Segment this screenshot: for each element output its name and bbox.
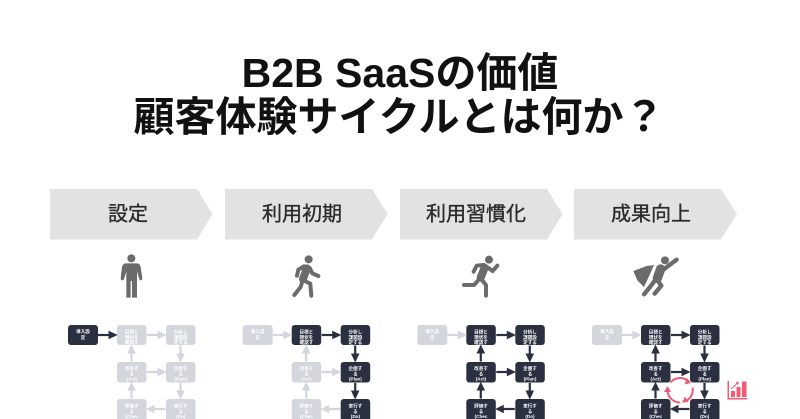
box: 目標と現状を確認する: 確認す bbox=[125, 339, 139, 346]
flow diagram: 利用習慣化 bbox=[417, 325, 545, 419]
step banner: 利用初期 bbox=[225, 189, 388, 240]
arrow: 実行 to 評価 bbox=[322, 406, 340, 412]
box: 導入設定: 定 bbox=[605, 334, 610, 341]
arrow: 改善 to 目標 bbox=[477, 346, 484, 362]
box: 評価する: る bbox=[129, 409, 134, 414]
box: 実行する: る bbox=[528, 409, 533, 414]
box: 改善する bbox=[292, 362, 321, 382]
box: 企画する: (Plan) bbox=[174, 377, 188, 382]
arrow: 改善 to 企画 bbox=[322, 368, 340, 376]
box: 実行する bbox=[341, 399, 370, 419]
box: 目標と現状を確認する: 確認す bbox=[300, 339, 314, 346]
arrow: 目標 to 分析 bbox=[496, 332, 515, 338]
arrow: 導入設定 to 目標 bbox=[622, 332, 640, 338]
arrow: 目標 to 分析 bbox=[671, 332, 690, 338]
box: 実行する: 実行す bbox=[174, 402, 188, 410]
box: 分析し課題設定する: 定する bbox=[523, 339, 537, 346]
box: 企画する: 企画す bbox=[174, 365, 188, 372]
flow diagram: 成果向上 bbox=[592, 325, 720, 419]
box: 企画する: る bbox=[353, 372, 358, 377]
arrow: 改善 to 企画 bbox=[496, 368, 515, 376]
box: 実行する bbox=[690, 399, 720, 419]
box: 企画する: 企画す bbox=[698, 365, 712, 372]
box: 評価する: (Chec bbox=[125, 414, 139, 419]
arrow: 導入設定 to 目標 bbox=[273, 332, 291, 338]
arrow: 評価 to 改善 bbox=[652, 383, 659, 398]
box: 目標と現状を確認する: 目標と bbox=[125, 328, 139, 336]
box: 分析し課題設定する: 分析し bbox=[698, 328, 712, 336]
arrow: 目標 to 分析 bbox=[147, 332, 166, 338]
box: 分析し課題設定する: 定する bbox=[174, 339, 188, 346]
box: 目標と現状を確認する: 目標と bbox=[474, 328, 488, 336]
box: 改善する bbox=[117, 362, 146, 382]
box: 改善する bbox=[466, 362, 496, 382]
box: 改善する: (Act) bbox=[301, 377, 312, 382]
box: 分析し課題設定する bbox=[515, 325, 545, 346]
title bbox=[134, 50, 664, 140]
arrow: 分析 to 企画 bbox=[526, 346, 533, 362]
box: 企画する: (Plan) bbox=[698, 377, 712, 382]
box: 分析し課題設定する bbox=[690, 325, 720, 346]
box: 評価する: 評価す bbox=[474, 402, 488, 410]
box: 分析し課題設定する: 分析し bbox=[523, 328, 537, 336]
box: 導入設定 bbox=[68, 325, 98, 345]
icon: walking person bbox=[294, 255, 318, 296]
box: 企画する bbox=[341, 362, 370, 382]
box: 目標と現状を確認する bbox=[117, 325, 146, 346]
box: 実行する: る bbox=[702, 409, 707, 414]
box: 企画する: (Plan) bbox=[349, 377, 362, 382]
box: 評価する: (Chec bbox=[475, 414, 488, 419]
box: 実行する: る bbox=[353, 409, 358, 414]
box: 目標と現状を確認する bbox=[641, 325, 670, 346]
box: 評価する: 評価す bbox=[300, 402, 314, 410]
arrow: 導入設定 to 目標 bbox=[98, 332, 116, 338]
box: 目標と現状を確認する bbox=[292, 325, 321, 346]
box: 評価する: 評価す bbox=[649, 402, 663, 410]
step banner: 利用初期: 利用初期 bbox=[262, 202, 342, 226]
arrow: 分析 to 企画 bbox=[701, 346, 708, 362]
box: 導入設定: 定 bbox=[81, 334, 86, 341]
arrow: 分析 to 企画 bbox=[352, 346, 359, 362]
box: 目標と現状を確認する: 現状を bbox=[474, 334, 488, 341]
step banner: 成果向上 bbox=[574, 189, 737, 240]
box: 実行する: (Do) bbox=[525, 414, 535, 419]
box: 分析し課題設定する bbox=[166, 325, 196, 346]
icon: circular cycle arrows bbox=[664, 378, 693, 403]
box: 評価する: る bbox=[653, 409, 658, 414]
box: 分析し課題設定する: 課題設 bbox=[698, 334, 712, 341]
box: 実行する: 実行す bbox=[349, 402, 363, 410]
step banner: 利用習慣化: 利用習慣化 bbox=[426, 202, 526, 226]
box: 分析し課題設定する bbox=[341, 325, 370, 346]
title: 顧客体験サイクルとは何か？ bbox=[134, 94, 664, 140]
arrow: 改善 to 目標 bbox=[128, 346, 135, 362]
box: 目標と現状を確認する: 確認す bbox=[649, 339, 663, 346]
box: 目標と現状を確認する: 現状を bbox=[649, 334, 663, 341]
box: 改善する: る bbox=[479, 372, 484, 377]
box: 目標と現状を確認する: 現状を bbox=[125, 334, 139, 341]
arrow: 企画 to 実行 bbox=[526, 383, 533, 398]
icon: rising bar chart bbox=[728, 381, 747, 400]
box: 目標と現状を確認する bbox=[466, 325, 496, 346]
step banner: 利用習慣化 bbox=[400, 189, 562, 240]
box: 実行する: 実行す bbox=[698, 402, 712, 410]
box: 改善する: 改善す bbox=[300, 365, 314, 372]
box: 導入設定 bbox=[243, 325, 273, 345]
box: 目標と現状を確認する: 目標と bbox=[649, 328, 663, 336]
arrow: 企画 to 実行 bbox=[177, 383, 184, 398]
box: 実行する: 実行す bbox=[523, 402, 537, 410]
box: 改善する: る bbox=[304, 372, 309, 377]
box: 分析し課題設定する: 課題設 bbox=[349, 334, 363, 341]
box: 評価する bbox=[117, 399, 146, 419]
box: 分析し課題設定する: 課題設 bbox=[174, 334, 188, 341]
arrow: 企画 to 実行 bbox=[701, 383, 708, 398]
title: B2B SaaSの価値 bbox=[242, 50, 558, 96]
box: 評価する: 評価す bbox=[125, 402, 139, 410]
box: 実行する bbox=[515, 399, 545, 419]
arrow: 実行 to 評価 bbox=[671, 406, 690, 412]
box: 導入設定 bbox=[417, 325, 447, 345]
box: 企画する: る bbox=[702, 372, 707, 377]
box: 改善する: (Act) bbox=[476, 377, 487, 382]
arrow: 目標 to 分析 bbox=[322, 332, 340, 338]
box: 分析し課題設定する: 定する bbox=[349, 339, 363, 346]
arrow: 実行 to 評価 bbox=[147, 406, 166, 412]
box: 評価する bbox=[292, 399, 321, 419]
box: 企画する: 企画す bbox=[349, 365, 363, 372]
box: 目標と現状を確認する: 現状を bbox=[300, 334, 314, 341]
box: 企画する: る bbox=[528, 372, 533, 377]
box: 実行する bbox=[166, 399, 196, 419]
box: 改善する: 改善す bbox=[125, 365, 139, 372]
arrow: 実行 to 評価 bbox=[496, 406, 515, 412]
box: 改善する: 改善す bbox=[474, 365, 488, 372]
box: 評価する bbox=[641, 399, 670, 419]
box: 導入設定: 定 bbox=[255, 334, 260, 341]
box: 企画する: (Plan) bbox=[524, 377, 537, 382]
arrow: 評価 to 改善 bbox=[303, 383, 310, 398]
arrow: 企画 to 実行 bbox=[352, 383, 359, 398]
box: 実行する: (Do) bbox=[700, 414, 710, 419]
box: 目標と現状を確認する: 目標と bbox=[300, 328, 313, 336]
arrow: 改善 to 目標 bbox=[652, 346, 659, 362]
box: 改善する: (Act) bbox=[650, 377, 661, 382]
box: 企画する bbox=[515, 362, 545, 382]
icon: flying superhero with cape bbox=[633, 256, 677, 294]
box: 改善する: (Act) bbox=[126, 377, 137, 382]
box: 実行する: (Do) bbox=[351, 414, 360, 419]
box: 評価する: る bbox=[304, 409, 309, 414]
arrow: 評価 to 改善 bbox=[128, 383, 135, 398]
flow diagram: 利用初期 bbox=[243, 325, 370, 419]
flow diagram: 設定 bbox=[68, 325, 196, 419]
box: 導入設定: 導入設 bbox=[425, 328, 440, 335]
box: 評価する bbox=[466, 399, 496, 419]
box: 実行する: (Do) bbox=[176, 414, 186, 419]
box: 改善する bbox=[641, 362, 670, 382]
box: 導入設定: 導入設 bbox=[600, 328, 614, 335]
box: 企画する bbox=[690, 362, 720, 382]
box: 導入設定: 導入設 bbox=[76, 328, 90, 335]
box: 改善する: る bbox=[129, 372, 134, 377]
arrow: 改善 to 目標 bbox=[303, 346, 310, 362]
icon: standing person bbox=[121, 254, 142, 298]
box: 実行する: る bbox=[178, 409, 183, 414]
box: 分析し課題設定する: 課題設 bbox=[523, 334, 537, 341]
box: 企画する bbox=[166, 362, 196, 382]
box: 評価する: (Chec bbox=[300, 414, 313, 419]
arrow: 改善 to 企画 bbox=[147, 368, 166, 376]
box: 改善する: る bbox=[653, 372, 658, 377]
box: 企画する: る bbox=[178, 372, 183, 377]
box: 評価する: (Chec bbox=[649, 414, 663, 419]
box: 分析し課題設定する: 分析し bbox=[174, 328, 188, 336]
box: 導入設定: 導入設 bbox=[251, 328, 265, 335]
arrow: 改善 to 企画 bbox=[671, 368, 690, 376]
step banner: 設定 bbox=[50, 189, 212, 240]
box: 評価する: る bbox=[479, 409, 484, 414]
step banner: 設定: 設定 bbox=[108, 202, 148, 226]
arrow: 導入設定 to 目標 bbox=[447, 332, 466, 338]
step banner: 成果向上: 成果向上 bbox=[611, 202, 691, 226]
box: 分析し課題設定する: 定する bbox=[698, 339, 712, 346]
box: 分析し課題設定する: 分析し bbox=[349, 328, 363, 336]
box: 導入設定 bbox=[592, 325, 622, 345]
box: 目標と現状を確認する: 確認す bbox=[474, 339, 488, 346]
arrow: 評価 to 改善 bbox=[477, 383, 484, 398]
box: 導入設定: 定 bbox=[430, 334, 435, 341]
box: 改善する: 改善す bbox=[649, 365, 663, 372]
box: 企画する: 企画す bbox=[523, 365, 537, 372]
arrow: 分析 to 企画 bbox=[177, 346, 184, 362]
icon: running person bbox=[464, 256, 497, 296]
